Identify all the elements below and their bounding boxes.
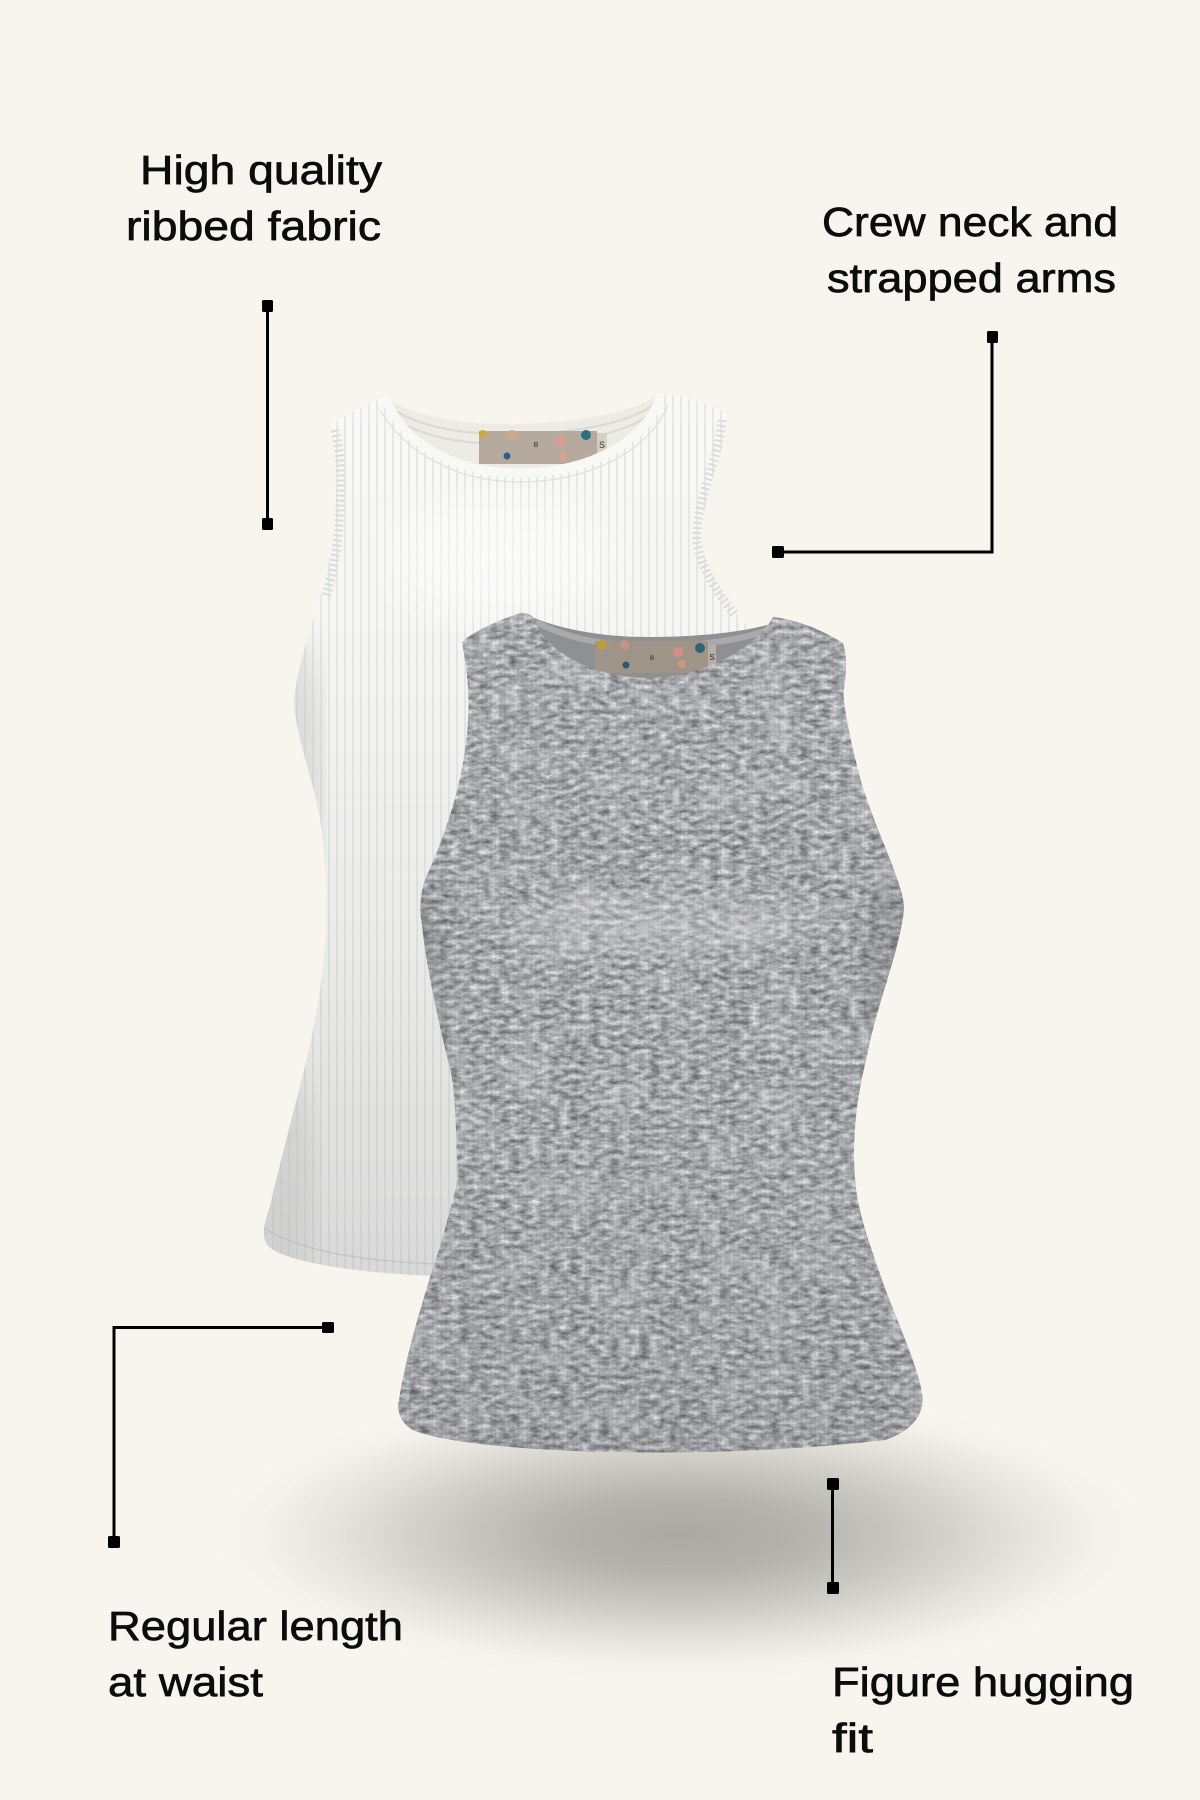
white tank label: S (599, 440, 605, 450)
callout: regular length at waist (108, 1322, 403, 1705)
text: high quality ribbed fabric (126, 147, 383, 249)
grey tank label: B (650, 656, 654, 662)
leader line: fabric (262, 300, 273, 530)
grey tank label (595, 640, 716, 673)
floor shadow (210, 1390, 1150, 1680)
white tank label: B (534, 442, 539, 449)
callout: high quality ribbed fabric (126, 147, 383, 530)
text: regular length at waist: at waist (108, 1659, 264, 1705)
text: figure hugging fit (832, 1659, 1134, 1761)
text: high quality ribbed fabric: ribbed fabric (126, 203, 381, 249)
leader line: fit (827, 1478, 839, 1594)
text: crew neck and strapped arms (822, 199, 1118, 301)
text: crew neck and strapped arms: strapped arms (827, 255, 1116, 301)
text: figure hugging fit: Figure hugging (832, 1659, 1134, 1705)
callout: figure hugging fit (827, 1478, 1134, 1761)
text: regular length at waist (108, 1603, 403, 1705)
white tank body (264, 394, 746, 1276)
leader line: length (108, 1322, 334, 1548)
callout: crew neck and strapped arms (772, 199, 1118, 558)
text: regular length at waist: Regular length (108, 1603, 403, 1649)
white tank neck and arm bands (326, 393, 735, 615)
grey tank label: S (709, 653, 715, 662)
text: crew neck and strapped arms: Crew neck and (822, 199, 1118, 245)
white tank inner back neck (385, 393, 661, 470)
text: figure hugging fit: fit (832, 1715, 874, 1761)
white ribbed tank top (264, 394, 746, 1276)
grey tank body (390, 600, 930, 1460)
white tank label (479, 430, 607, 464)
grey tank inner back neck (534, 618, 774, 690)
leader line: neck (772, 331, 998, 558)
grey heather tank top (390, 600, 930, 1460)
text: high quality ribbed fabric: High quality (140, 147, 383, 193)
